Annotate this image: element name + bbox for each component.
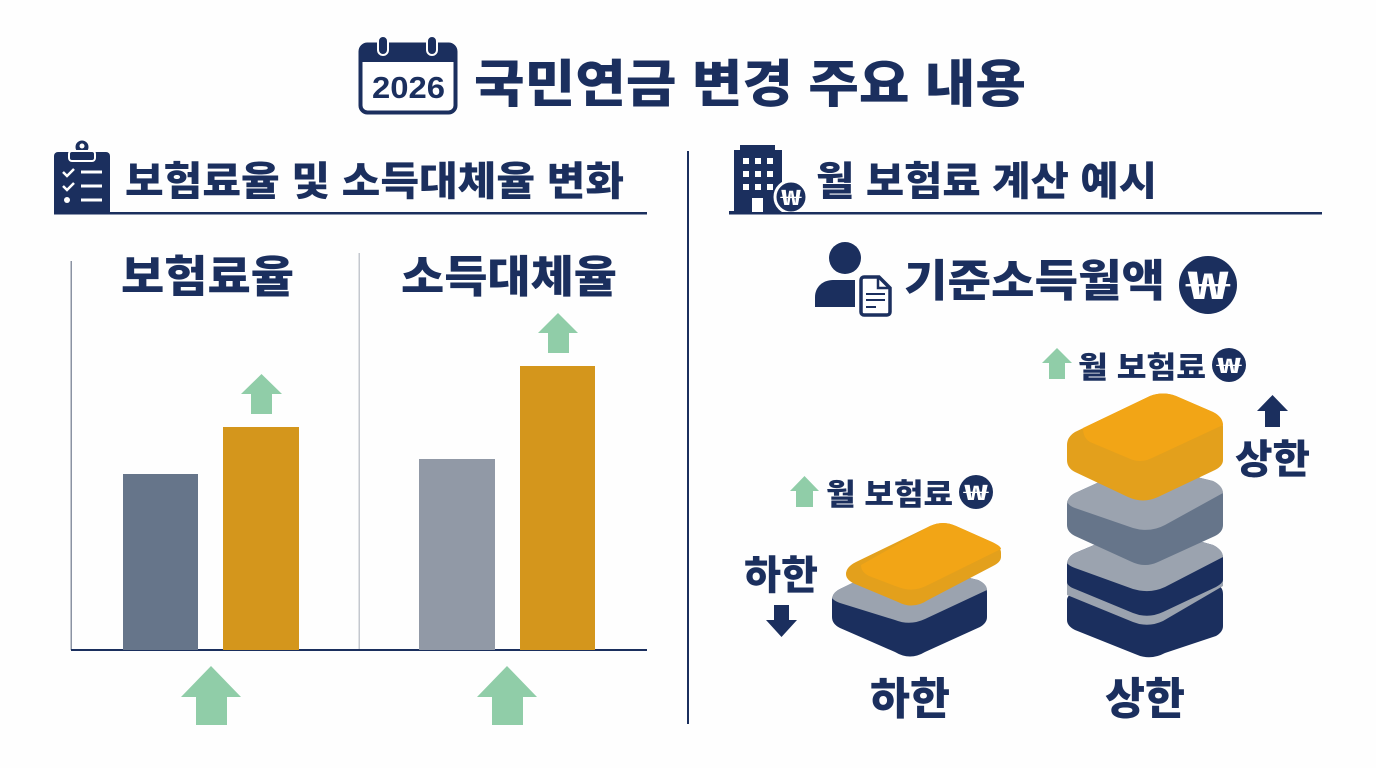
icon: won coin [1179, 255, 1237, 314]
navy middle slab with grey top [1067, 530, 1223, 616]
lower limit side label: 하한 [744, 554, 818, 598]
arrow: lower limit down [766, 605, 797, 637]
arrow: premium rate increase [181, 666, 241, 725]
navy bottom slab [1067, 570, 1223, 657]
orange top slab [1067, 394, 1223, 500]
icon: building with won coin [729, 145, 807, 214]
monthly premium label: upper [1042, 348, 1246, 385]
chart label: premium rate: 보험료율 [121, 253, 294, 302]
icon: person with document [815, 242, 890, 315]
monthly premium label: upper: 월 보험료 [1078, 352, 1206, 385]
section heading: left [54, 140, 647, 214]
upper limit stack [1042, 348, 1310, 724]
section heading: right [729, 145, 1322, 214]
icon: building with won coin: ₩ [779, 182, 802, 212]
arrow: premium rate bar up [241, 374, 282, 414]
bar chart: premium and replacement rates [70, 253, 647, 725]
arrow: replacement rate bar up [538, 313, 578, 353]
title [359, 36, 1026, 113]
upper limit bottom label: 상한 [1105, 675, 1185, 724]
monthly premium label: upper: ₩ [1215, 350, 1242, 380]
heading text: 월 보험료 계산 예시 [816, 160, 1157, 204]
navy base slab [832, 572, 987, 656]
icon: 2026 calendar [359, 36, 457, 112]
standard monthly income heading [815, 242, 1237, 315]
bar: premium rate after [223, 427, 299, 650]
bar: replacement rate after [520, 366, 595, 650]
chart label: replacement rate: 소득대체율 [401, 253, 617, 302]
income label: 기준소득월액 [904, 257, 1165, 306]
heading text: 보험료율 및 소득대체율 변화 [125, 160, 624, 204]
panel: premium and replacement rate change [54, 140, 647, 725]
icon: 2026 calendar: 2026 [372, 70, 445, 105]
bar: premium rate before [123, 474, 198, 650]
monthly premium label: lower: 월 보험료 [826, 479, 953, 512]
bar: replacement rate before [419, 459, 495, 650]
monthly premium label: lower [790, 475, 993, 512]
upper limit side label: 상한 [1235, 438, 1310, 482]
arrow: replacement rate increase [477, 666, 537, 725]
title text: 국민연금 변경 주요 내용 [474, 56, 1026, 113]
lower limit stack [744, 475, 1001, 724]
orange slab [846, 523, 1001, 606]
monthly premium label: lower: ₩ [962, 477, 989, 507]
grey slab [1067, 468, 1223, 565]
icon: won coin: ₩ [1185, 255, 1232, 310]
arrow: upper limit up [1257, 395, 1288, 427]
panel: monthly premium calculation example [729, 145, 1322, 724]
lower limit bottom label: 하한 [870, 675, 950, 724]
icon: clipboard checklist [54, 140, 110, 214]
